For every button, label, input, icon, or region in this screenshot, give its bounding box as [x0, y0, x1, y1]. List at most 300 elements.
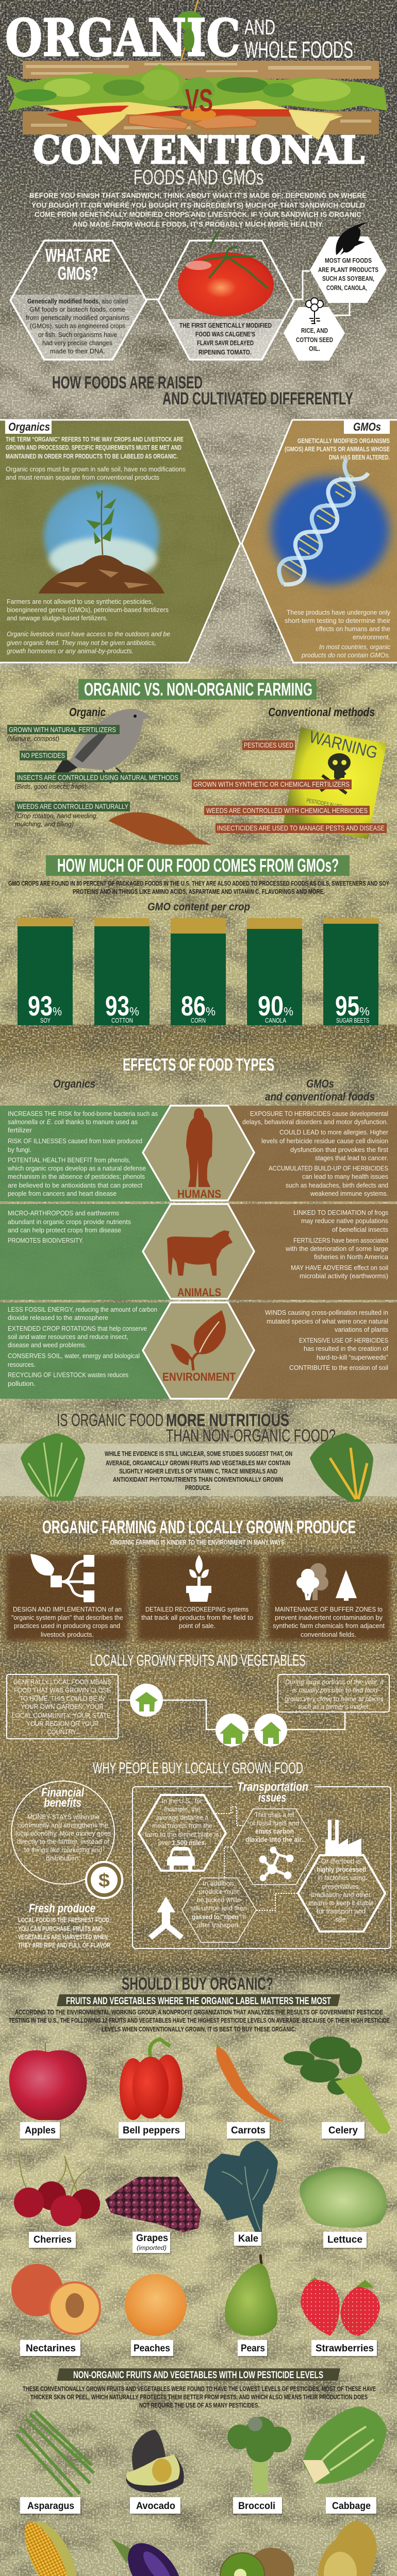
item: celery — [284, 2037, 391, 2139]
text: organics animals — [8, 1209, 131, 1244]
item: celery: Celery — [328, 2125, 358, 2136]
heading: transportation issues: Transportation — [237, 1780, 308, 1794]
hexagon: fossil fuels: emits carbon — [255, 1827, 294, 1835]
text: gmos animals — [285, 1209, 389, 1280]
text: organics humans — [7, 1110, 158, 1197]
icon: warning sign: WARNING — [307, 727, 379, 762]
text: gmo testing: effects on humans and the — [316, 625, 390, 633]
icon: human hexagon — [143, 1106, 254, 1200]
row: humans — [7, 1106, 389, 1200]
circle: financial benefits: benefits — [44, 1796, 81, 1810]
text: gmo definition: GM foods or biotech foods, come — [29, 306, 125, 313]
text: organics environment: disease and weed problems. — [8, 1341, 87, 1349]
text: gmo testing: short-term testing to determine their — [285, 617, 391, 624]
text box: farmers market: such as a farmer’s market. — [298, 1703, 370, 1710]
text: fresh produce: YOU CAN PURCHASE. FRUITS AND — [18, 1925, 103, 1933]
text: farmers and livestock rules: given organic feed. They may not be given antibiotics, — [7, 639, 156, 647]
text box: local food definition — [7, 1674, 118, 1739]
column headings — [53, 1077, 375, 1103]
text: farmers and livestock rules: and sewage sludge-based fertilizers. — [7, 614, 108, 622]
title: organic and whole foods: ORGANIC — [5, 8, 240, 68]
text: organics animals: PROMOTES BIODIVERSITY. — [8, 1236, 84, 1244]
list: organic farming methods: NO PESTICIDES — [21, 751, 65, 759]
text: gmos humans — [242, 1110, 389, 1197]
icon: leaf — [108, 812, 211, 845]
text: organics animals: MICRO-ARTHROPODS and earthworms — [8, 1209, 119, 1217]
text: nutrition evidence — [105, 1450, 292, 1492]
item: nectarines: Nectarines — [26, 2343, 76, 2354]
card: organic system plan: "organic system plan" that describes the — [11, 1614, 123, 1621]
card: organic system plan: DESIGN AND IMPLEMENTATION of an — [13, 1605, 122, 1613]
bar: canola: CANOLA — [265, 1016, 286, 1024]
text: gmos environment: has resulted in the creation of — [304, 1345, 388, 1352]
text: gmo intro: PROTEINS AND IN THINGS LIKE AMINO ACIDS, ASPARTAME AND VITAMIN C, FLAVORINGS AND MORE. — [73, 888, 325, 895]
text box: local food definition: YOUR REGION OR YOUR — [26, 1720, 98, 1727]
icon: tomato — [178, 231, 274, 316]
hexagon: fossil fuels: This uses a lot — [255, 1811, 294, 1819]
hexagon: unripe produce: In addition, — [203, 1879, 236, 1887]
icon: dollar coin — [86, 1862, 122, 1898]
panel: gmos — [242, 420, 397, 663]
text: fresh produce: THEY ARE RIPE AND FULL OF FLAVOR — [18, 1941, 110, 1949]
text: environmental working group — [9, 2008, 390, 2033]
card: buffer zones: conventional fields. — [301, 1631, 356, 1638]
text: gmos animals: with the deterioration of some large — [285, 1245, 388, 1252]
bar: soy: 93 — [28, 991, 53, 1022]
text: gmos humans: such as headaches, birth defects and — [286, 1181, 388, 1189]
hexagon: meal distance: farm to the dinner plate is — [145, 1831, 219, 1838]
bar: corn: CORN — [191, 1016, 206, 1024]
icon: olive with toothpick — [177, 0, 203, 61]
row: environment — [8, 1302, 388, 1399]
icon: leaf hexagon — [143, 1302, 254, 1399]
list: organic farming methods: (Birds, good insects, traps). — [15, 783, 88, 790]
column headings: GMOs — [306, 1077, 334, 1090]
sub-heading: ORGANIC FARMING IS KINDER TO THE ENVIRONMENT IN MANY WAYS: — [110, 1538, 286, 1546]
text box: farmers market — [278, 1674, 389, 1712]
text: low pesticide explanation — [23, 2385, 376, 2409]
item: carrots — [216, 2043, 285, 2139]
panel: organic farming and locally grown produce — [6, 1517, 391, 1949]
text: organic definition: and must remain separate from conventional products — [6, 473, 159, 481]
hexagon: fossil fuels: dioxide into the air. — [245, 1836, 303, 1843]
hexagon: fossil fuels — [231, 1809, 318, 1885]
text: gmos humans: can lead to many health issues — [302, 1173, 388, 1180]
text box: farmers market: is usually possible to find food — [292, 1686, 378, 1694]
item: peaches — [125, 2274, 187, 2356]
bar: corn: % — [206, 1005, 216, 1018]
text: gmo definition: had very precise changes — [42, 339, 112, 347]
heading: what are gmos: GMOs? — [58, 263, 98, 284]
icon: warning sign — [284, 727, 387, 839]
column headings: and conventional foods — [265, 1090, 375, 1103]
icon: dollar coin: $ — [98, 1870, 110, 1891]
hexagon: unripe produce: gassed to "ripen" it — [192, 1913, 246, 1921]
card: buffer zones: MAINTENANCE OF BUFFER ZONES to — [275, 1605, 383, 1613]
bar: corn — [171, 918, 226, 1025]
item: asparagus — [16, 2411, 94, 2514]
card: buffer zones: prevent inadvertent contamination by — [275, 1614, 383, 1621]
text: organics environment: dioxide released to the atmosphere — [8, 1314, 108, 1321]
text: organics animals: abundant in organic crops provide nutrients — [8, 1218, 131, 1226]
text: gmo definition: or fish. Such organisms have — [38, 331, 117, 338]
text: gmo testing: In most countries, organic — [319, 643, 390, 651]
panel: what are gmos — [10, 241, 146, 360]
text: vs: VS — [185, 83, 213, 118]
text: gmo testing — [285, 608, 391, 659]
text: organics animals: and can help protect crops from disease — [8, 1226, 121, 1234]
text box: farmers market: grown very close to home at places — [285, 1695, 384, 1703]
label: gmos: GMOs — [353, 420, 381, 433]
text: organic definition: THE TERM “ORGANIC” REFERS TO THE WAY CROPS AND LIVESTOCK ARE — [6, 435, 184, 443]
circle: financial benefits: to things like marketing and — [24, 1846, 102, 1854]
panel: is organic food more nutritious — [0, 1411, 397, 1502]
text: organics environment — [8, 1306, 157, 1387]
text: nutrition evidence: ANTIOXIDANT PHYTONUTRIENTS THAN CONVENTIONALLY GROWN — [113, 1476, 283, 1483]
text: gmo definition: (GMOs), such as engineered crops — [30, 322, 125, 330]
bar: sugar beets: 95 — [335, 991, 359, 1022]
bar: soy — [18, 918, 73, 1025]
text: organics humans: are believed to be antioxidants that can protect — [8, 1181, 142, 1189]
heading: more nutritious: IS ORGANIC FOOD — [57, 1411, 163, 1430]
panel: organics — [0, 420, 240, 663]
hexagon: unripe produce: after transport. — [197, 1921, 240, 1929]
text: organics environment: soil and water resources and reduce insect, — [8, 1333, 128, 1341]
hexagon: highly processed: for transport and — [317, 1907, 366, 1915]
text: organics humans: POTENTIAL HEALTH BENEFIT from phenols, — [8, 1156, 130, 1164]
illustration: bird — [48, 709, 152, 783]
item: nectarines — [11, 2264, 100, 2356]
text: organics environment: EXTENDED CROP ROTATIONS that help conserve — [8, 1325, 147, 1332]
label: organics: Organics — [8, 420, 50, 433]
panel: how much of our food comes from gmos — [8, 855, 389, 1025]
item: grapes: Grapes — [136, 2233, 168, 2244]
item: cherries: Cherries — [34, 2234, 72, 2245]
item: avocado — [126, 2430, 184, 2514]
card: recordkeeping: that track all products from the field to — [141, 1614, 253, 1621]
text box: local food definition: YOUR OWN GARDEN, YOUR — [21, 1703, 104, 1710]
text: gmos humans: weakened immune systems. — [310, 1190, 388, 1197]
hexagon: meal distance: over 1,500 miles. — [158, 1839, 206, 1846]
text box: local food definition: TO HOME. THIS COULD BE IN — [20, 1694, 105, 1702]
panel: transportation issues — [133, 1780, 391, 1948]
hexagon: highly processed: highly processed — [317, 1866, 366, 1873]
panel: first gm food tomato — [146, 231, 294, 360]
text: organics environment: LESS FOSSIL ENERGY, reducing the amount of carbon — [8, 1306, 157, 1313]
text: gmos animals: may reduce native populations — [301, 1217, 388, 1225]
text: gmos humans: COULD LEAD to more allergies. Higher — [279, 1128, 389, 1136]
text: plant products: ARE PLANT PRODUCTS — [318, 266, 378, 274]
list: conventional farming methods: PESTICIDES USED — [244, 741, 293, 749]
text: flavr savr: RIPENING TOMATO. — [198, 348, 252, 356]
heading: should i buy organic: SHOULD I BUY ORGANIC? — [122, 1974, 273, 1994]
text box: farmers market: During large portions of the year, it — [285, 1678, 384, 1686]
icon: factory — [325, 1820, 361, 1856]
text: organics environment: CONSERVES SOIL, water, energy and biological — [8, 1352, 140, 1360]
hexagon: unripe produce: produce must — [199, 1888, 239, 1895]
item: lettuce — [300, 2167, 387, 2248]
title: conventional foods and gmos: CONVENTIONAL — [33, 128, 365, 173]
intro text: COME FROM GENETICALLY MODIFIED CROPS AND LIVESTOCK. IF YOUR SANDWICH IS ORGANIC — [35, 210, 361, 218]
text: farmers and livestock rules: Farmers are not allowed to use synthetic pesticides, — [7, 598, 153, 605]
icon: human hexagon: HUMANS — [177, 1188, 221, 1200]
hexagon: meal distance — [139, 1795, 226, 1871]
item: grapes: (imported) — [137, 2244, 167, 2251]
item: kale — [204, 2141, 278, 2246]
intro text: YOU BOUGHT IT (OR WHERE YOU BOUGHT ITS INGREDIENTS) MUCH OF THAT SANDWICH COULD — [31, 201, 365, 209]
icon: warning sign: PESTICIDES IN USE — [306, 798, 342, 810]
title: organic and whole foods: AND — [244, 15, 275, 39]
intro text: BEFORE YOU FINISH THAT SANDWICH, THINK ABOUT WHAT IT’S MADE OF; DEPENDING ON WHERE — [29, 191, 367, 199]
text: environmental working group: LEVELS WHEN CONVENTIONALLY GROWN, IT IS BEST TO BUY THESE ORGANIC: — [102, 2025, 296, 2033]
text: organics humans: salmonella or E. coli thanks to manure used as — [8, 1118, 138, 1126]
hexagon: unripe produce: be picked while — [197, 1896, 241, 1904]
intro text — [29, 191, 367, 228]
text: organics humans: by fungi. — [8, 1146, 31, 1154]
text: organics humans: people from cancers and heart disease — [8, 1190, 117, 1197]
text: farmers and livestock rules: Organic livestock must have access to the outdoors and be — [7, 630, 170, 638]
text: gmos environment: WINDS causing cross-pollination resulted in — [265, 1309, 388, 1316]
hexagon: unripe produce — [182, 1878, 256, 1942]
row: animals — [8, 1204, 389, 1299]
text: organics humans: fertilizer — [8, 1126, 32, 1134]
item: grapes — [105, 2177, 201, 2253]
text: fresh produce: VEGETABLES ARE HARVESTED WHEN — [18, 1933, 108, 1941]
text: gmos animals: LINKED TO DECIMATION of frogs — [293, 1209, 388, 1216]
item: bell peppers — [119, 2039, 185, 2139]
text: farmers and livestock rules: bioengineered genes (GMOs), petroleum-based fertilizers — [7, 606, 169, 614]
item: asparagus: Asparagus — [27, 2501, 74, 2512]
panel: effects of food types — [0, 1055, 397, 1399]
text: gmos environment — [265, 1309, 388, 1371]
heading: transportation issues: issues — [258, 1791, 286, 1805]
text: organics environment: RECYCLING OF LIVESTOCK wastes reduces — [8, 1371, 128, 1379]
text: gmo testing: products do not contain GMOs. — [301, 651, 390, 659]
item: apples — [9, 2043, 87, 2139]
list: organic farming methods — [7, 725, 180, 828]
icon: merging arrow — [148, 1896, 184, 1940]
item: carrots: Carrots — [231, 2125, 266, 2136]
text: gmo testing: These products have undergone only — [287, 608, 390, 616]
bar: canola: 90 — [258, 991, 284, 1022]
bar: cotton — [94, 918, 150, 1025]
card: buffer zones — [268, 1554, 390, 1641]
circle: financial benefits: community and strengthens the — [18, 1821, 108, 1829]
hexagon: meal distance: meal travels from the — [152, 1822, 212, 1829]
circle: financial benefits — [11, 1781, 122, 1898]
heading: effects of food types: EFFECTS OF FOOD TYPES — [123, 1055, 274, 1075]
bar chart: gmo content per crop — [18, 918, 378, 1025]
list: organic farming methods: INSECTS ARE CONTROLLED USING NATURAL METHODS — [17, 773, 178, 782]
bar: cotton: 93 — [105, 991, 129, 1022]
text: gmos humans: stages that lead to cancer. — [315, 1154, 388, 1162]
text: gmos humans: levels of herbicide residue cause cell division — [261, 1137, 388, 1145]
callout: most gm foods — [284, 222, 387, 361]
circle: financial benefits: MONEY STAYS within the — [27, 1813, 100, 1821]
text: gmo definition: from genetically modified organisms — [26, 314, 129, 321]
text: organics humans: which organic crops develop as a natural defense — [7, 1164, 146, 1172]
text: plant products: OIL. — [309, 345, 320, 352]
item: mango — [318, 2520, 377, 2576]
title: conventional foods and gmos — [33, 128, 365, 189]
heading: how foods are raised — [52, 373, 353, 409]
text: gmos animals: MAY HAVE ADVERSE effect on soil — [291, 1264, 388, 1272]
heading: how foods are raised: HOW FOODS ARE RAISED — [52, 373, 203, 393]
icon: cotton — [306, 298, 323, 324]
sub-heading: conventional methods: Conventional methods — [268, 705, 375, 719]
icon: cow hexagon: ANIMALS — [177, 1286, 221, 1299]
circle: financial benefits: directly to the farmer, instead of — [17, 1838, 109, 1845]
list: organic farming methods: (Manure, compost) — [7, 735, 59, 742]
item: cabbage: Cabbage — [332, 2501, 371, 2512]
bar: sugar beets: % — [359, 1005, 370, 1018]
hexagon: highly processed: in factories using — [318, 1874, 366, 1882]
text: organics environment: resources. — [8, 1361, 36, 1368]
card: buffer zones: synthetic farm chemicals from adjacent — [273, 1622, 385, 1630]
text: plant products: MOST GM FOODS — [325, 257, 372, 264]
card: organic system plan: livestock products. — [41, 1631, 94, 1638]
text: gmos animals: of beneficial insects — [332, 1226, 388, 1233]
text box: local food definition: FOOD THAT WAS GROWN CLOSE — [14, 1686, 111, 1694]
icon: leaf hexagon: ENVIRONMENT — [162, 1370, 236, 1383]
text: flavr savr — [179, 321, 272, 356]
item: cherries — [14, 2154, 100, 2248]
circle: financial benefits: distribution. — [46, 1854, 80, 1862]
text: gmos animals: microbial activity (earthworms) — [300, 1272, 388, 1280]
hexagon: highly processed: preservatives, — [322, 1883, 360, 1890]
title: conventional foods and gmos: FOODS AND GMOs — [134, 165, 263, 189]
text: organic definition: Organic crops must be grown in safe soil, have no modifications — [6, 465, 186, 473]
card: recordkeeping: point of sale. — [179, 1622, 216, 1630]
bar: soy: SOY — [40, 1016, 51, 1024]
heading: more nutritious — [57, 1411, 336, 1446]
panel backgrounds — [0, 1106, 397, 1399]
card: organic system plan: practices used in producing crops and — [14, 1622, 120, 1630]
heading: what are gmos — [45, 245, 110, 284]
text: organics humans: RISK OF ILLNESSES caused from toxin produced — [8, 1137, 142, 1145]
card: organic system plan — [6, 1554, 128, 1641]
item: kale: Kale — [238, 2233, 258, 2244]
bar: sugar beets — [323, 918, 378, 1025]
bar: sugar beets: SUGAR BEETS — [336, 1016, 369, 1024]
icon: corn — [336, 222, 370, 255]
panel: should i buy organic — [9, 1974, 391, 2356]
text: gmos environment: mutated species of what were once natural — [267, 1317, 388, 1325]
item: broccoli: Broccoli — [238, 2501, 275, 2512]
card: recordkeeping: DETAILED RECORDKEEPING systems — [145, 1605, 249, 1613]
text: gmo intro — [8, 879, 389, 895]
label: gmos — [344, 420, 390, 434]
text: flavr savr: FOOD WAS CALGENE’S — [195, 330, 255, 338]
text: organics humans: mechanism in the absence of pesticides; phenols — [8, 1173, 145, 1180]
hexagon: unripe produce: still unripe and then — [190, 1904, 247, 1912]
item: peaches: Peaches — [134, 2343, 170, 2354]
hexagon: highly processed: irradiation, and other — [311, 1891, 371, 1899]
card: recordkeeping — [138, 1554, 260, 1641]
list: organic farming methods: WEEDS ARE CONTROLLED NATURALLY — [17, 802, 129, 810]
text: gmos environment: CONTRIBUTE to the erosion of soil — [289, 1364, 388, 1371]
text: organic definition: MAINTAINED IN ORDER FOR PRODUCTS TO BE LABELED AS ORGANIC. — [6, 452, 178, 460]
text: fresh produce — [18, 1902, 110, 1949]
text box: local food definition: LOCAL COMMUNITY, YOUR STATE, — [12, 1711, 112, 1719]
text: nutrition evidence: PRODUCE. — [185, 1484, 211, 1492]
panel: low pesticide produce — [16, 2368, 387, 2576]
text: fresh produce: LOCAL FOOD IS THE FRESHEST FOOD — [18, 1916, 109, 1924]
text: gmo testing: environment. — [353, 633, 390, 641]
icon: car — [167, 1847, 195, 1870]
list: organic farming methods: mulching, and tilling) — [15, 820, 74, 828]
hexagon: highly processed: Or the food is — [321, 1857, 361, 1865]
text: gmo definition: made to their DNA. — [50, 347, 105, 355]
item: kiwi — [220, 2548, 294, 2576]
item: lettuce: Lettuce — [327, 2234, 362, 2245]
hexagon: meal distance: average distance a — [156, 1814, 209, 1821]
text box: local food definition: GENERALLY LOCAL FOOD MEANS — [13, 1678, 111, 1686]
text box: local food definition: COUNTRY. — [47, 1728, 77, 1736]
hexagon: fossil fuels: of fossil fuels and — [250, 1819, 299, 1827]
text: gmos environment: variations of plants — [335, 1326, 388, 1333]
column headings: Organics — [53, 1077, 95, 1090]
text: fresh produce: Fresh produce — [29, 1902, 95, 1916]
circle: financial benefits: local economy. More money goes — [15, 1829, 111, 1837]
text: nutrition evidence: AVERAGE, ORGANICALLY GROWN FRUITS AND VEGETABLES MAY CONTAIN — [106, 1459, 290, 1467]
item: eggplant — [111, 2533, 192, 2576]
text: farmers and livestock rules: growth hormones or any animal-by-products. — [7, 647, 134, 655]
hexagon: highly processed: means to keep it stable — [308, 1899, 374, 1907]
illustration: seedling in soil — [38, 484, 164, 594]
bar: soy: % — [53, 1005, 62, 1018]
heading: transportation issues — [237, 1780, 308, 1805]
chart title: GMO content per crop — [147, 901, 250, 913]
diagram: local food houses — [118, 1684, 345, 1747]
item: broccoli — [227, 2417, 291, 2514]
item: apples: Apples — [25, 2125, 56, 2136]
text: gmo description — [285, 437, 390, 461]
hexagon: meal distance: example, the — [164, 1805, 200, 1813]
item: corn — [16, 2514, 87, 2576]
item: cabbage — [303, 2406, 387, 2514]
text: gmos humans: delays, behavioral disorders and motor dysfunction. — [242, 1118, 388, 1126]
text: gmos humans: dysfunction that provokes the first — [290, 1146, 388, 1154]
text: plant products — [296, 257, 378, 352]
heading: more nutritious: MORE NUTRITIOUS — [166, 1411, 289, 1430]
illustration: sandwich — [6, 61, 387, 140]
icon: leaf flowchart — [30, 1554, 94, 1602]
hexagon: highly processed — [298, 1820, 385, 1931]
text: plant products: CORN, CANOLA, — [326, 284, 367, 292]
bar: cotton: % — [129, 1005, 139, 1018]
text: low pesticide explanation: NOT REQUIRE THE USE OF AS MANY PESTICIDES. — [139, 2401, 259, 2409]
text: farmers and livestock rules — [7, 598, 170, 655]
item: strawberries: Strawberries — [316, 2343, 374, 2354]
item: pears — [225, 2255, 277, 2356]
text: organic definition — [6, 435, 186, 481]
text: gmos animals: fisheries in North America — [314, 1253, 389, 1261]
text: plant products: COTTON SEED — [296, 336, 333, 344]
text: plant products: SUCH AS SOYBEAN, — [322, 275, 374, 282]
item: strawberries — [301, 2277, 380, 2356]
text: gmos environment: hard-to-kill “superweeds” — [317, 1353, 388, 1361]
hexagon: highly processed: sale. — [335, 1916, 347, 1923]
bar: cotton: COTTON — [111, 1016, 133, 1024]
item: avocado: Avocado — [136, 2501, 175, 2512]
text: flavr savr: FLAVR SAVR DELAYED — [197, 339, 254, 347]
heading: what are gmos: WHAT ARE — [45, 245, 110, 266]
icon: cow hexagon — [143, 1204, 254, 1299]
text: nutrition evidence: SLIGHTLY HIGHER LEVELS OF VITAMIN C, TRACE MINERALS AND — [119, 1467, 277, 1475]
item: pears: Pears — [241, 2343, 265, 2354]
text: flavr savr: THE FIRST GENETICALLY MODIFIED — [179, 321, 272, 329]
